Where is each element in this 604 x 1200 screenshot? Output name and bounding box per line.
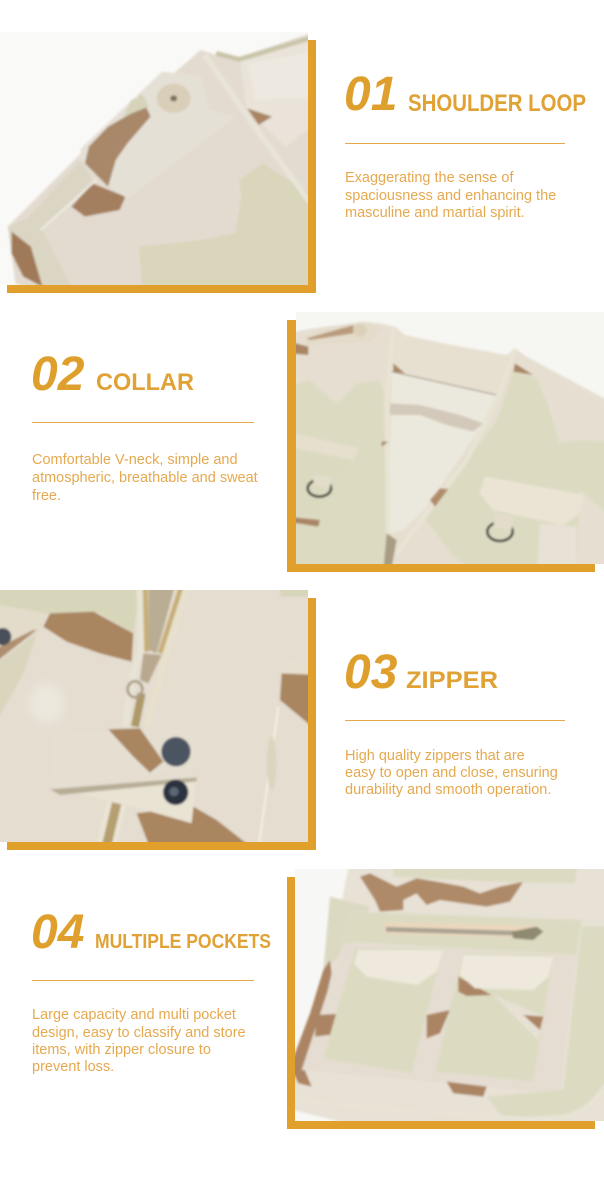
body text: atmospheric, breathable and sweat	[32, 470, 258, 486]
divider	[32, 980, 254, 981]
frame: left and bottom bars	[287, 877, 595, 1129]
body text	[32, 1007, 246, 1075]
photo: collar	[287, 312, 604, 577]
divider	[32, 422, 254, 423]
panel: shoulder loop	[0, 30, 586, 297]
body text: easy to open and close, ensuring	[345, 765, 558, 781]
number 04: 04	[31, 906, 84, 959]
number 03: 03	[344, 646, 398, 699]
body text: High quality zippers that are	[345, 748, 525, 764]
panel: collar	[31, 312, 604, 577]
body text: Exaggerating the sense of	[345, 170, 514, 186]
body text: Comfortable V-neck, simple and	[32, 452, 238, 468]
body text	[345, 748, 558, 798]
heading: collar: COLLAR	[96, 369, 194, 396]
body text: design, easy to classify and store	[32, 1025, 246, 1041]
photo: zipper	[0, 590, 308, 842]
body text: items, with zipper closure to	[32, 1042, 211, 1058]
frame: left and bottom bars	[287, 320, 595, 572]
body text	[345, 170, 556, 221]
photo: shoulder loop	[5, 32, 308, 285]
frame: right and bottom bars	[7, 598, 316, 850]
body text: durability and smooth operation.	[345, 782, 551, 798]
photo: pockets	[295, 869, 604, 1121]
heading: zipper: ZIPPER	[406, 667, 498, 694]
heading: multiple pockets: MULTIPLE POCKETS	[95, 931, 271, 953]
body text: masculine and martial spirit.	[345, 205, 525, 221]
body text: Large capacity and multi pocket	[32, 1007, 236, 1023]
divider	[345, 720, 565, 721]
panel: multiple pockets	[31, 860, 604, 1137]
number 02: 02	[31, 348, 85, 401]
body text	[32, 452, 258, 504]
number 01: 01	[344, 68, 397, 121]
divider	[345, 143, 565, 144]
body text: prevent loss.	[32, 1059, 114, 1075]
frame: right and bottom bars	[7, 40, 316, 293]
body text: free.	[32, 488, 61, 504]
panel: zipper	[0, 580, 565, 857]
body text: spaciousness and enhancing the	[345, 188, 556, 204]
